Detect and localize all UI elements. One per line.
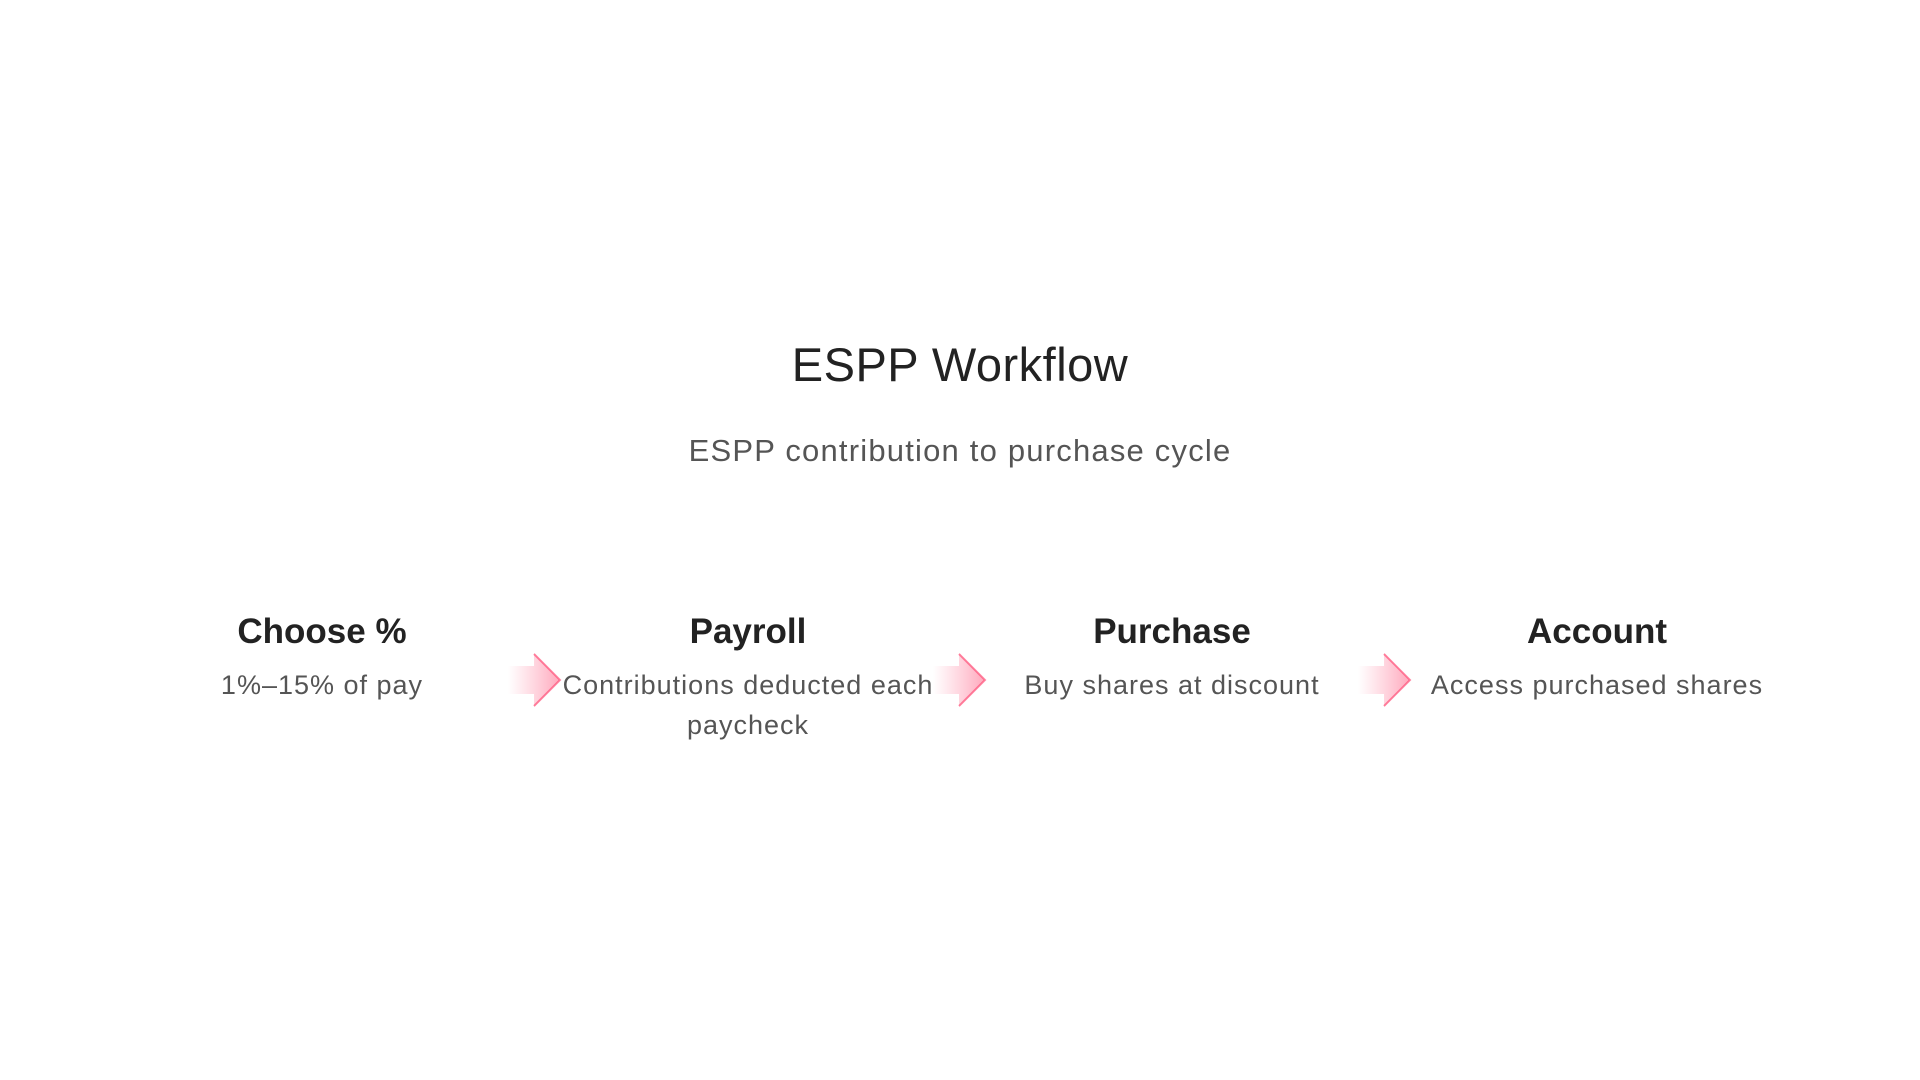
step: choose: Choose % (237, 612, 407, 651)
step: account: Access purchased shares (1431, 670, 1763, 700)
step: purchase: Purchase (1093, 612, 1251, 651)
arrow 1 (514, 653, 562, 707)
step: payroll: Payroll (690, 612, 806, 651)
subtitle: ESPP contribution to purchase cycle (689, 433, 1231, 468)
title: ESPP Workflow (792, 338, 1128, 391)
step: purchase: Buy shares at discount (1024, 670, 1320, 700)
step: choose (221, 612, 423, 700)
step: payroll (563, 612, 933, 740)
step: payroll: Contributions deducted each paycheck (563, 670, 933, 740)
step: choose: 1%–15% of pay (221, 670, 423, 700)
arrow 2 (938, 653, 986, 707)
arrow 3 (1364, 653, 1412, 707)
step: purchase (1024, 612, 1320, 700)
step: account: Account (1527, 612, 1667, 651)
step: account (1431, 612, 1763, 700)
